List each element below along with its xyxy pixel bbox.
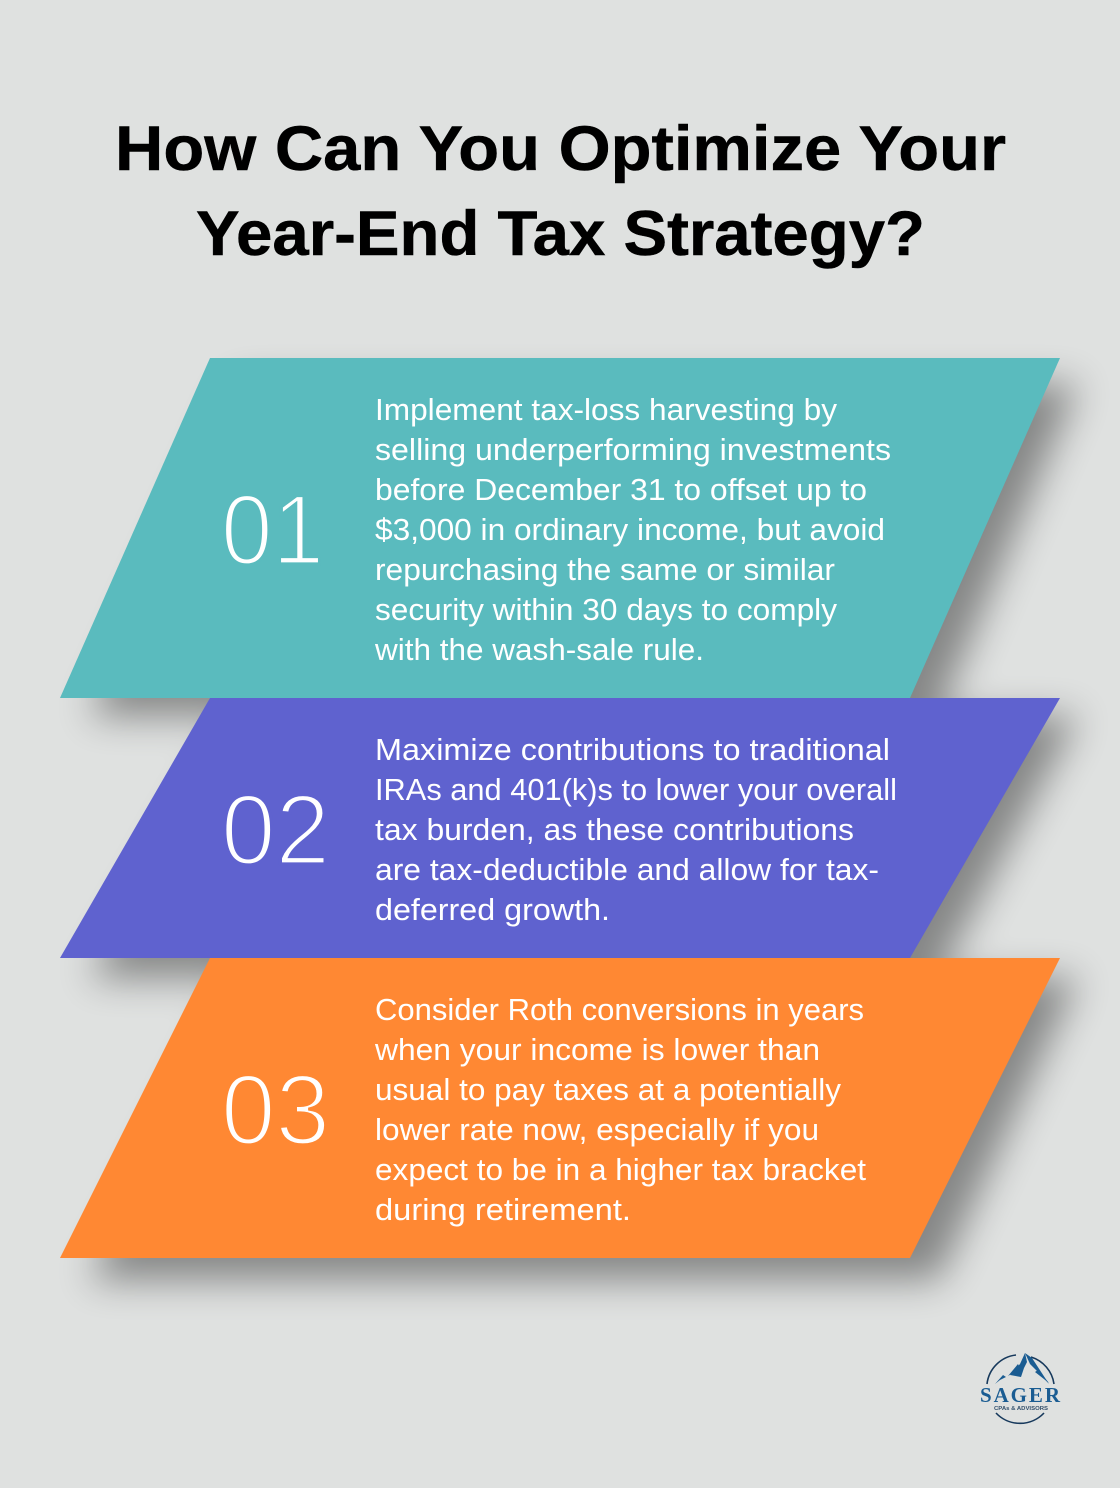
number 01: 01 bbox=[221, 474, 324, 585]
title bbox=[115, 114, 1006, 269]
text block 03: expect to be in a higher tax bracket bbox=[375, 1152, 866, 1187]
panel shape orange bbox=[60, 958, 1060, 1258]
text block 02 bbox=[375, 732, 897, 927]
panel shadows bbox=[90, 384, 1078, 1280]
text block 01: $3,000 in ordinary income, but avoid bbox=[375, 512, 885, 547]
text block 01: Implement tax-loss harvesting by bbox=[375, 392, 838, 427]
number 02: 02 bbox=[221, 774, 330, 885]
text block 02: tax burden, as these contributions bbox=[375, 812, 854, 847]
text block 02: are tax-deductible and allow for tax- bbox=[375, 852, 879, 887]
text block 01: security within 30 days to comply bbox=[375, 592, 838, 627]
text block 02: deferred growth. bbox=[375, 892, 610, 927]
text block 03: when your income is lower than bbox=[374, 1032, 820, 1067]
panel: step 02 bbox=[60, 698, 1060, 958]
number 03: 03 bbox=[221, 1054, 330, 1165]
logo tagline: CPAs & ADVISORS bbox=[994, 1406, 1048, 1412]
text block 01 bbox=[374, 392, 891, 667]
logo wordmark: SAGER bbox=[980, 1383, 1061, 1407]
text block 03: usual to pay taxes at a potentially bbox=[375, 1072, 842, 1107]
text block 01: before December 31 to offset up to bbox=[375, 472, 867, 507]
text block 02: IRAs and 401(k)s to lower your overall bbox=[375, 772, 897, 807]
text block 03: during retirement. bbox=[375, 1192, 631, 1227]
panel: step 03 bbox=[60, 958, 1060, 1258]
text block 03 bbox=[374, 992, 866, 1227]
text block 01: repurchasing the same or similar bbox=[375, 552, 835, 587]
text block 02: Maximize contributions to traditional bbox=[375, 732, 890, 767]
panel: step 01 bbox=[60, 358, 1060, 698]
panel shape purple bbox=[60, 698, 1060, 958]
logo: Sager CPAs & Advisors bbox=[980, 1353, 1061, 1423]
text block 01: selling underperforming investments bbox=[375, 432, 891, 467]
logo mountains bbox=[995, 1353, 1049, 1384]
panel shape teal bbox=[60, 358, 1060, 698]
logo ring arcs bbox=[987, 1355, 1054, 1423]
title: Year-End Tax Strategy? bbox=[196, 199, 925, 269]
text block 03: Consider Roth conversions in years bbox=[375, 992, 864, 1027]
text block 03: lower rate now, especially if you bbox=[375, 1112, 819, 1147]
text block 01: with the wash-sale rule. bbox=[374, 632, 704, 667]
title: How Can You Optimize Your bbox=[115, 114, 1006, 184]
